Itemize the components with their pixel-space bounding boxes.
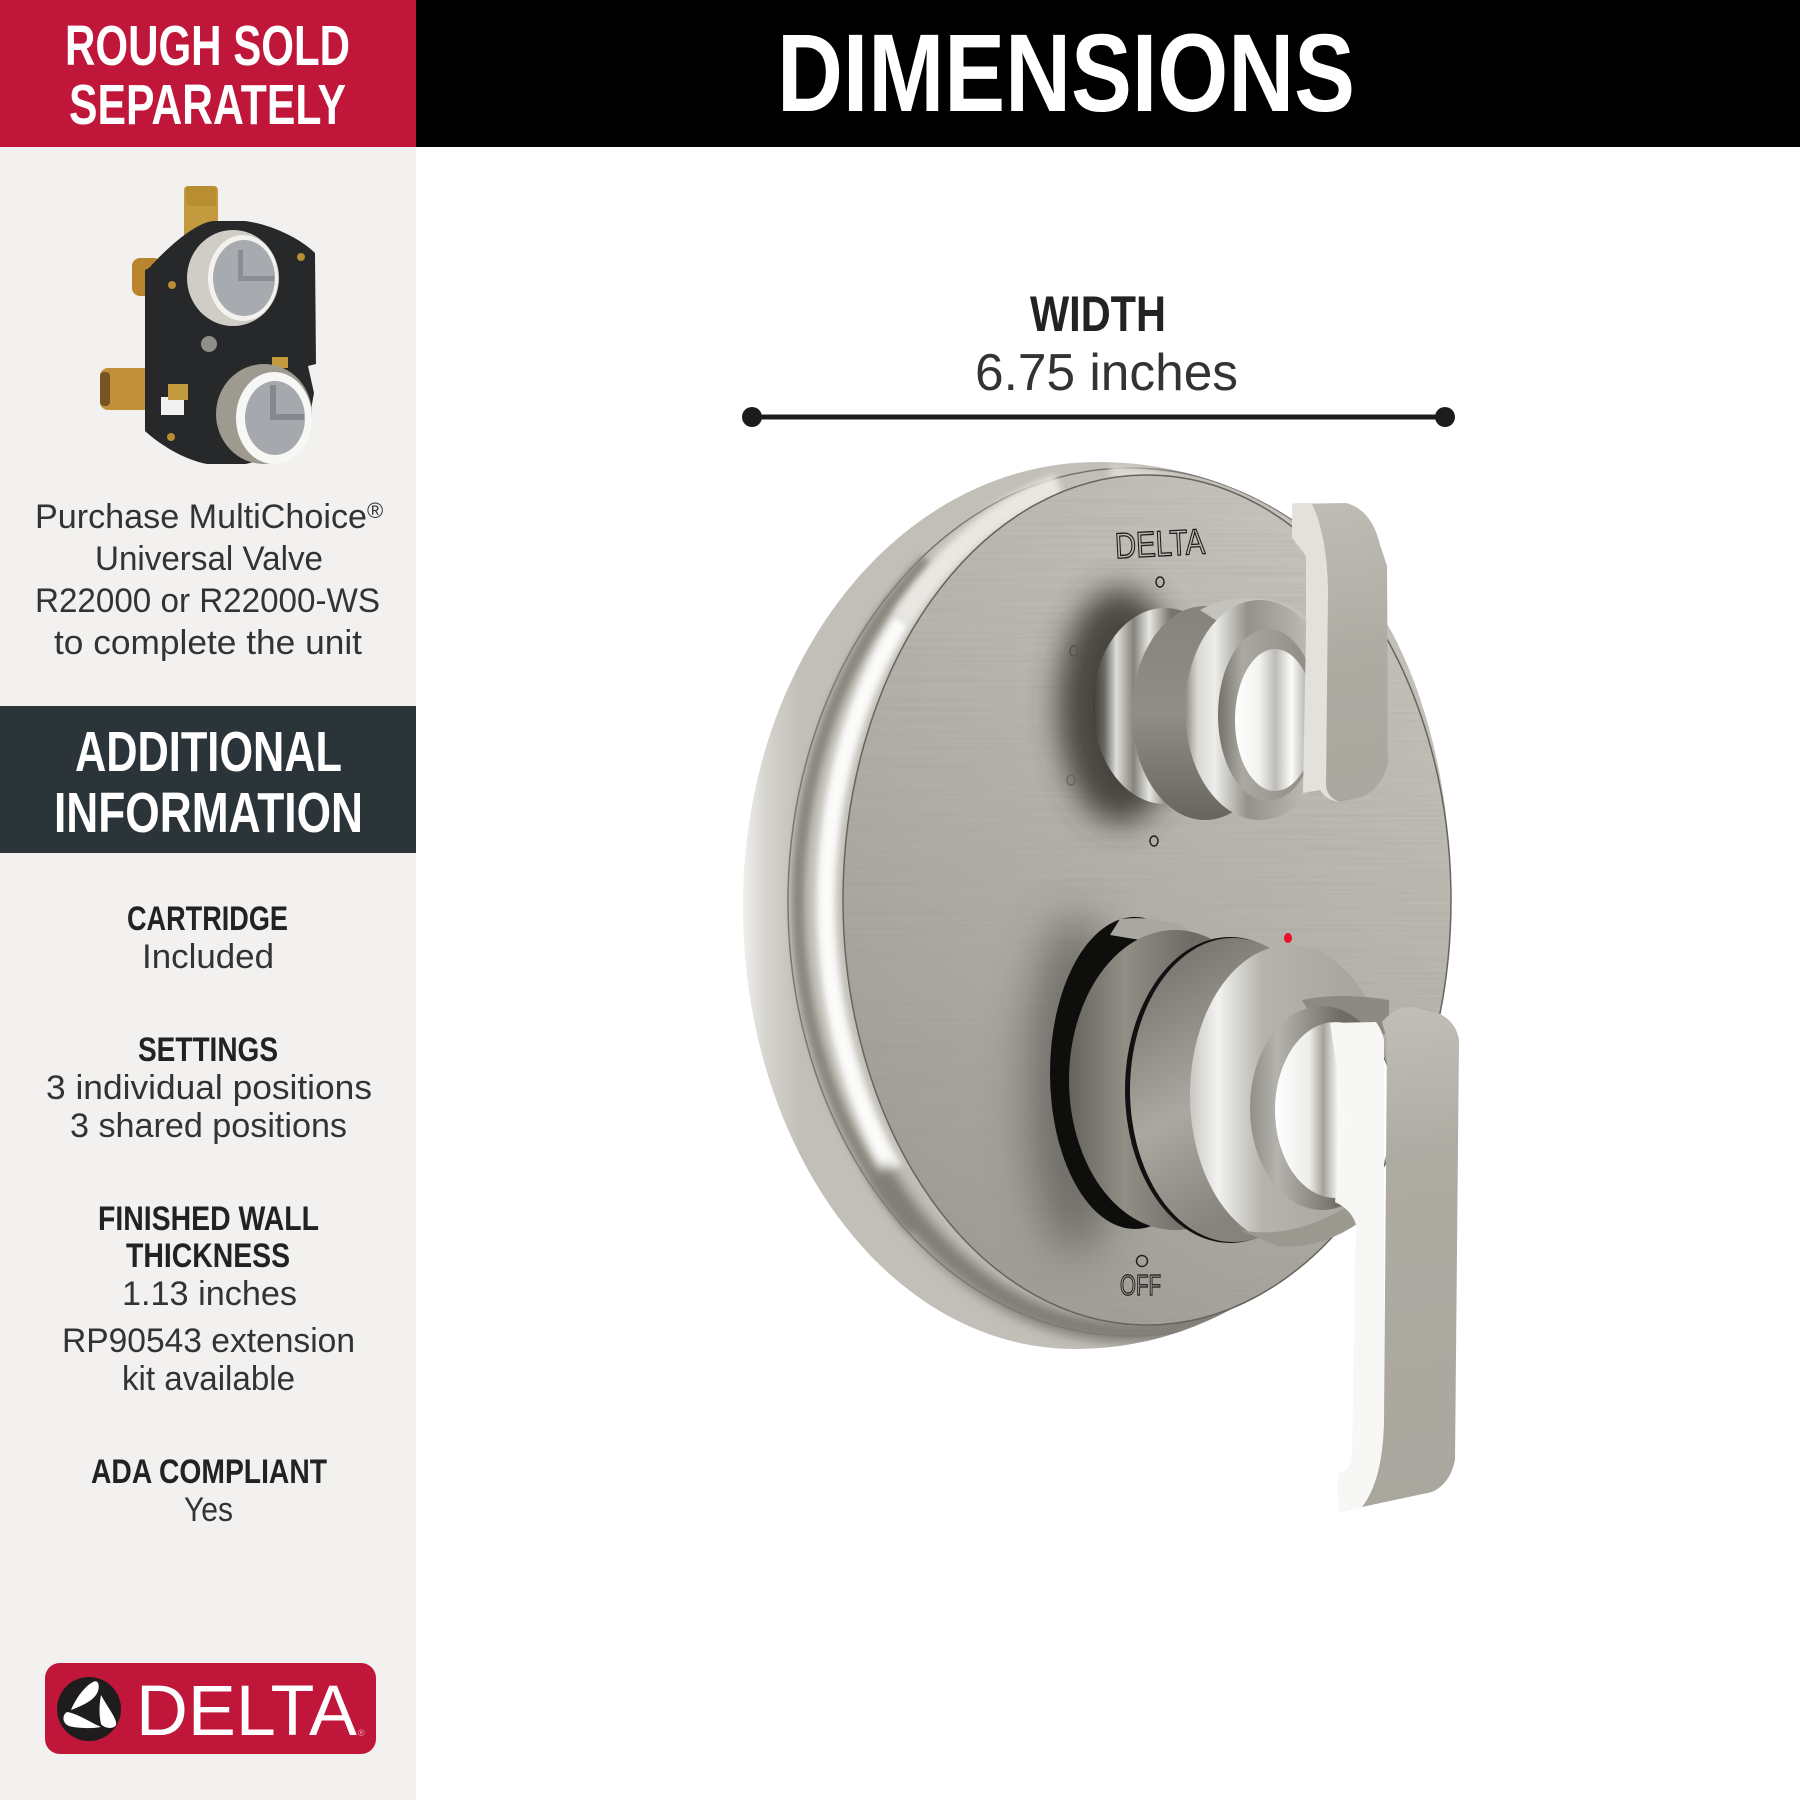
- text block: width measurement: [975, 286, 1238, 402]
- text block: finished wall thickness: kit available: [122, 1360, 295, 1398]
- lower lever: [1330, 1007, 1459, 1513]
- heading: additional information: ADDITIONAL: [75, 720, 342, 784]
- panel: rough sold separately banner: [0, 0, 416, 147]
- title: DIMENSIONS: [777, 12, 1355, 135]
- heading: additional information: INFORMATION: [54, 781, 363, 845]
- text block: cartridge: Included: [142, 938, 274, 976]
- upper knob: [1093, 598, 1335, 820]
- text block: cartridge: CARTRIDGE: [127, 900, 288, 938]
- icon: universal rough-in valve: [100, 186, 316, 464]
- text block: purchase note: to complete the unit: [54, 624, 363, 662]
- red indicator dot: [1284, 933, 1292, 943]
- brushed texture and contact shadows: [997, 500, 1286, 1272]
- engraved delta wordmark: DELTA: [1114, 521, 1206, 566]
- text block: purchase note: Purchase MultiChoice: [35, 498, 367, 536]
- heading: rough sold separately: SEPARATELY: [69, 73, 346, 137]
- arrow: width dimension line: [742, 407, 1455, 427]
- text block: purchase note: ®: [367, 498, 383, 523]
- text block: purchase note: R22000 or R22000-WS: [35, 582, 380, 620]
- text block: finished wall thickness: 1.13 inches: [122, 1275, 297, 1313]
- text block: finished wall thickness: THICKNESS: [126, 1237, 290, 1275]
- text block: ada compliant: ADA COMPLIANT: [91, 1453, 327, 1491]
- position markers: [1067, 577, 1164, 846]
- icon: delta logo badge: ®: [358, 1728, 365, 1738]
- text block: finished wall thickness: FINISHED WALL: [98, 1200, 319, 1238]
- text block: settings: [46, 1031, 372, 1145]
- heading: rough sold separately: [65, 14, 350, 137]
- text block: settings: 3 individual positions: [46, 1069, 372, 1107]
- off label: OFF: [1120, 1270, 1161, 1302]
- text block: ada compliant: [91, 1453, 327, 1529]
- trim plate rim: [743, 462, 1472, 1349]
- product: trim plate with handles: [743, 462, 1472, 1513]
- text block: settings: SETTINGS: [138, 1031, 278, 1069]
- text block: width measurement: WIDTH: [1030, 286, 1166, 342]
- heading: rough sold separately: ROUGH SOLD: [65, 14, 350, 78]
- panel: additional information banner: [0, 706, 416, 853]
- off label: [1120, 1256, 1161, 1302]
- heading: additional information: [54, 720, 363, 845]
- text block: purchase note: [35, 498, 383, 662]
- text block: purchase note: Universal Valve: [95, 540, 323, 578]
- upper lever: [1292, 503, 1388, 802]
- text block: width measurement: 6.75 inches: [975, 344, 1238, 402]
- text block: ada compliant: Yes: [184, 1491, 233, 1529]
- text block: finished wall thickness: RP90543 extension: [62, 1322, 355, 1360]
- text block: cartridge: [127, 900, 288, 976]
- trim plate face: [843, 475, 1451, 1325]
- text block: settings: 3 shared positions: [70, 1107, 347, 1145]
- text block: finished wall thickness: [62, 1200, 355, 1398]
- sidebar background: [0, 0, 416, 1800]
- panel: page title banner: [416, 0, 1800, 147]
- icon: delta logo badge: [45, 1663, 376, 1754]
- icon: delta logo badge: DELTA: [136, 1672, 358, 1751]
- lower knob: [1050, 917, 1395, 1246]
